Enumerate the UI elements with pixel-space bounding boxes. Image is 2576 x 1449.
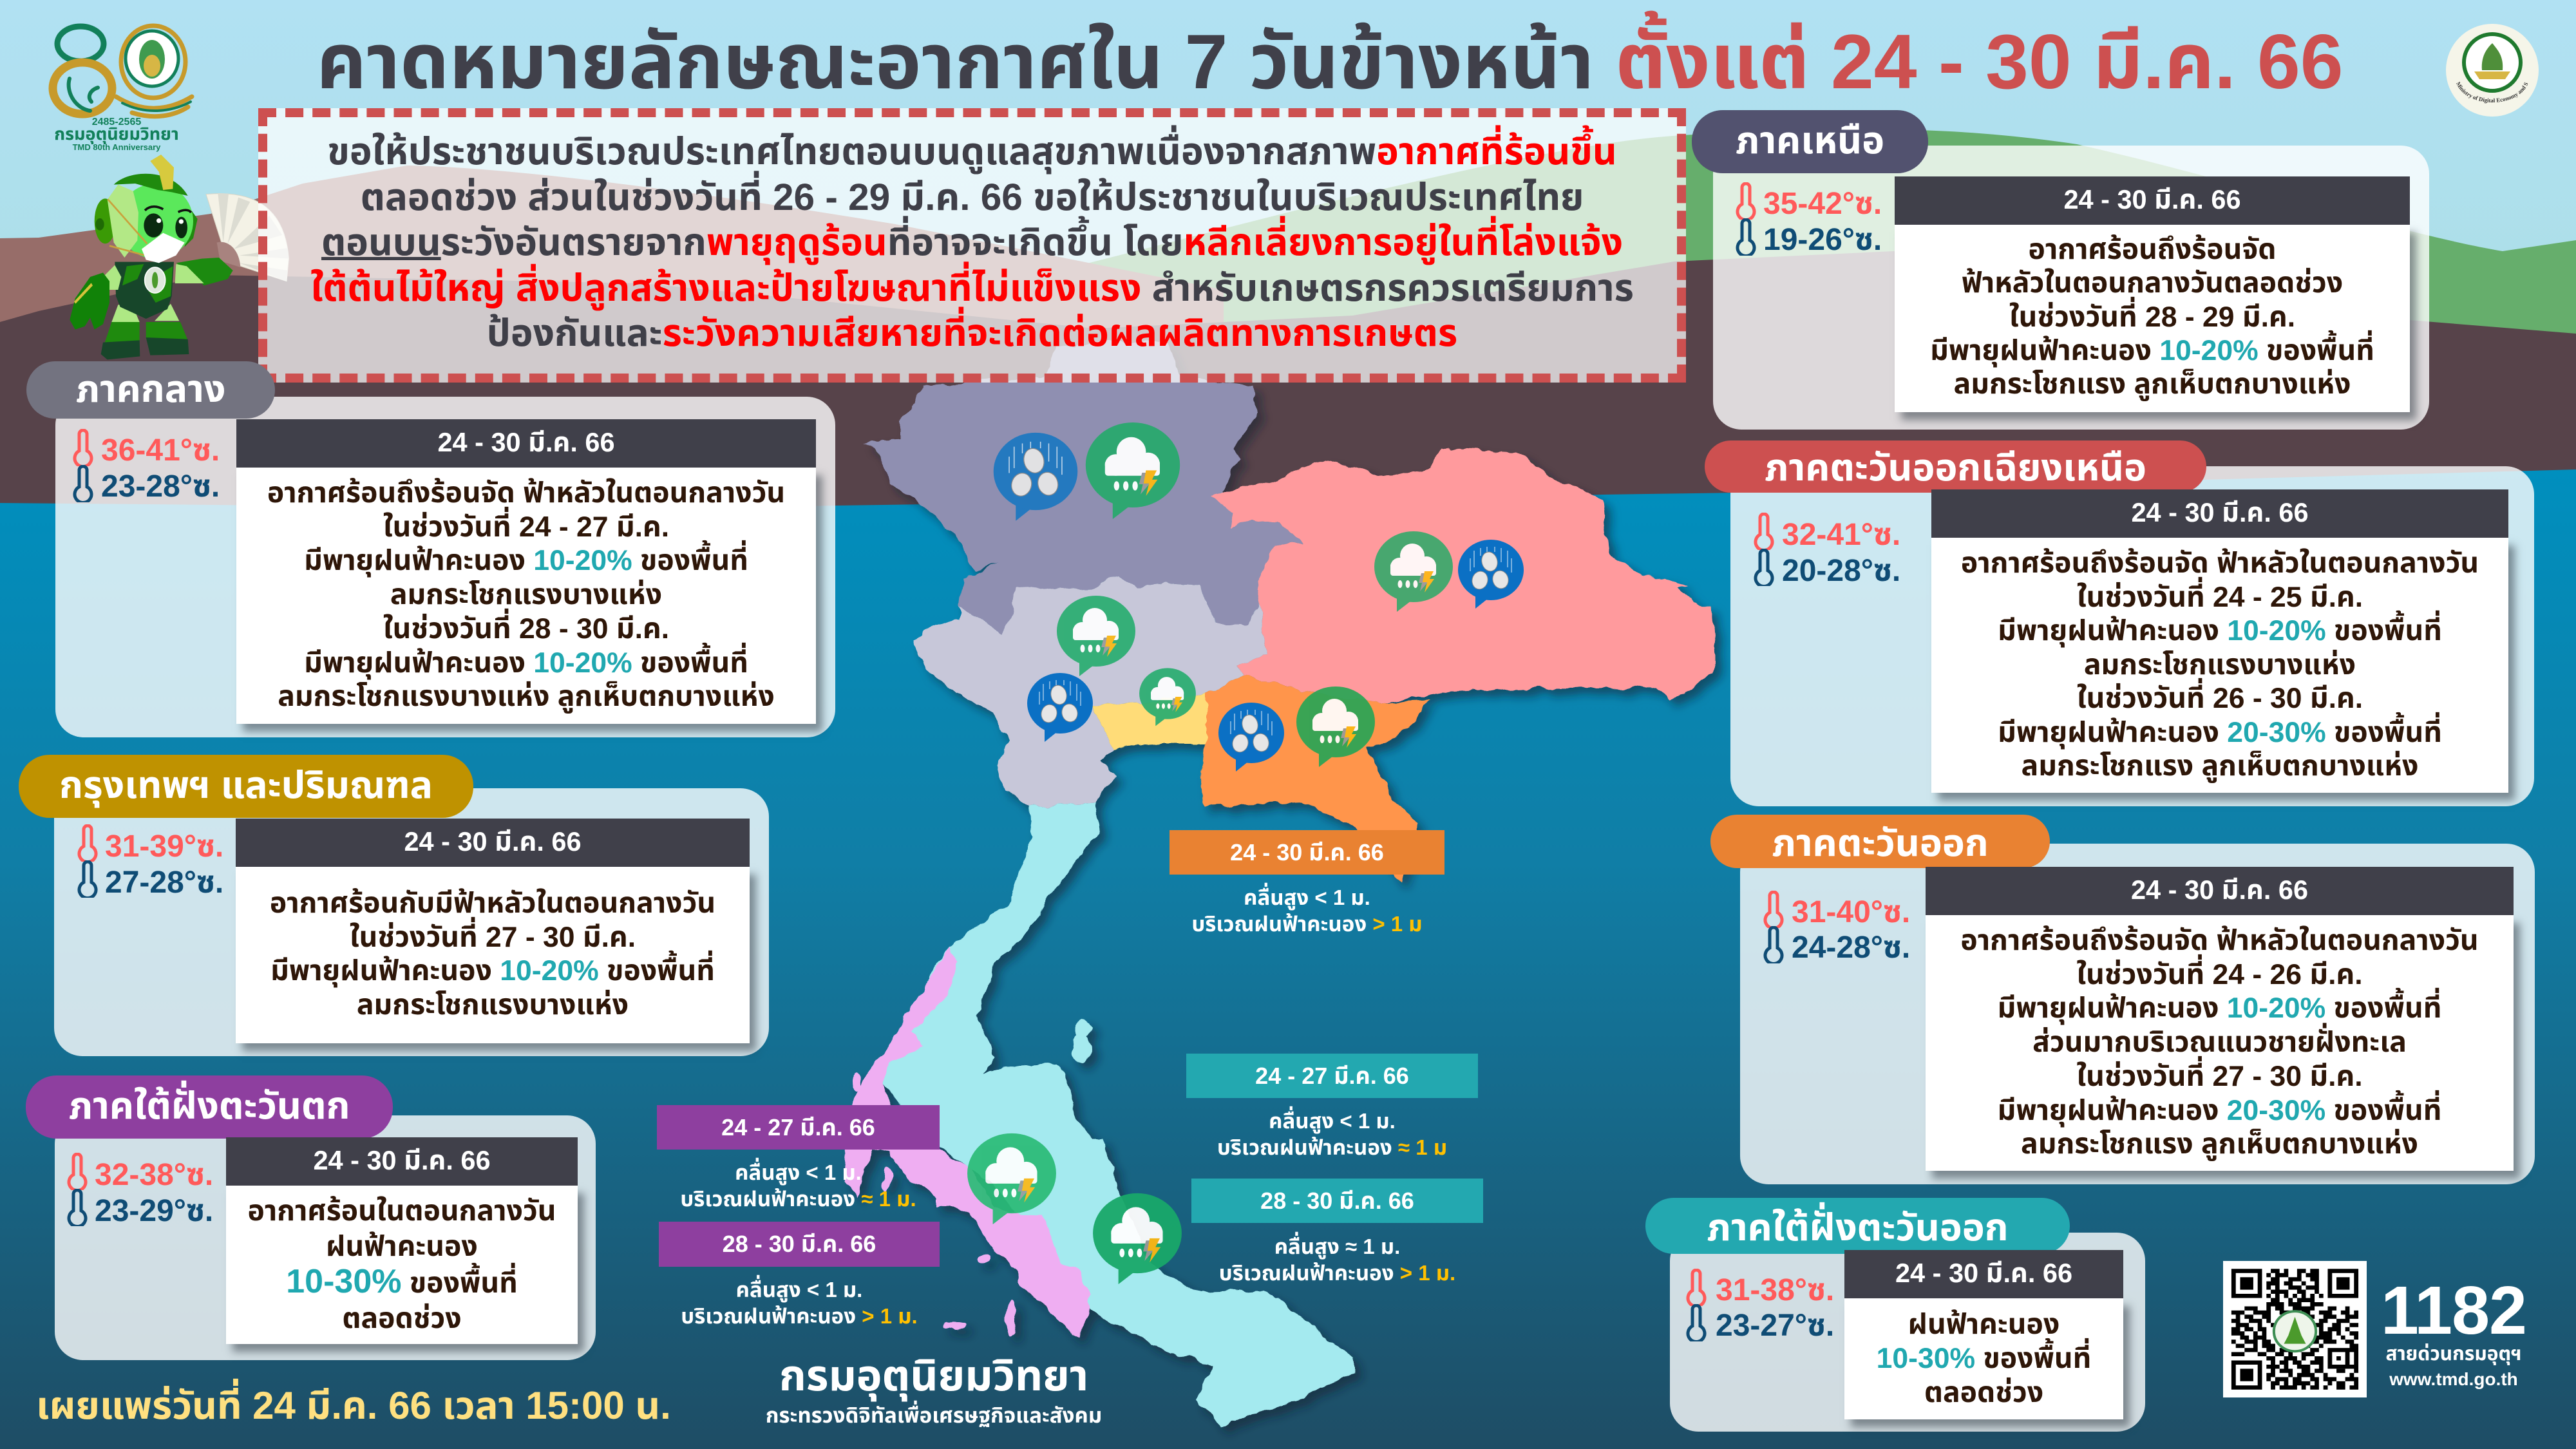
wave text: คลื่นสูง < 1 ม.	[1244, 886, 1370, 909]
forecast text: มีพายุฝนฟ้าคะนอง 10-20% ของพื้นที่	[1998, 615, 2442, 647]
temperature high: 35-42°ซ.	[1763, 187, 1882, 221]
map islands	[851, 1019, 1092, 1337]
thermometer: min temperature	[73, 465, 93, 502]
map region: bangkok	[1093, 694, 1211, 750]
wave text: คลื่นสูง < 1 ม.	[735, 1160, 862, 1184]
forecast text: อากาศร้อนกับมีฟ้าหลัวในตอนกลางวัน	[270, 887, 715, 919]
hotline and website: 1182	[2381, 1273, 2526, 1349]
date header: 24 - 30 มี.ค. 66	[2131, 497, 2309, 527]
weather pin: storm north	[1086, 422, 1180, 519]
icon: ministry seal	[2446, 24, 2539, 117]
map region: south	[883, 803, 1354, 1425]
panel: east region	[1710, 815, 2535, 1184]
department name: กรมอุตุนิยมวิทยา	[779, 1352, 1088, 1400]
forecast text: อากาศร้อนถึงร้อนจัด ฟ้าหลัวในตอนกลางวัน	[1961, 547, 2479, 579]
left arm	[103, 265, 121, 290]
thermometer: min temperature	[1685, 1304, 1707, 1341]
wave text: บริเวณฝนฟ้าคะนอง > 1 ม.	[681, 1304, 918, 1328]
weather pin: storm south west	[967, 1133, 1056, 1224]
date tag	[659, 1222, 940, 1267]
thermometer: max temperature	[73, 429, 93, 466]
hotline and website	[2370, 1280, 2537, 1387]
date tag	[1170, 830, 1444, 875]
body	[115, 262, 174, 319]
fan	[206, 193, 289, 281]
thermometer: max temperature	[67, 1153, 88, 1190]
forecast text: ฝนฟ้าคะนอง	[326, 1230, 478, 1262]
date tag	[657, 1105, 940, 1150]
forecast text: ในช่วงวันที่ 27 - 30 มี.ค.	[2076, 1061, 2363, 1092]
map region: north	[866, 341, 1303, 632]
temperature low: 27-28°ซ.	[105, 866, 223, 900]
thermometer: min temperature	[1736, 218, 1756, 256]
forecast text: ในช่วงวันที่ 24 - 27 มี.ค.	[383, 511, 669, 543]
forecast text: ลมกระโชกแรงบางแห่ง	[390, 579, 662, 611]
region label: south east: ภาคใต้ฝั่งตะวันออก	[1707, 1206, 2009, 1248]
date header: 24 - 30 มี.ค. 66	[1895, 1258, 2072, 1288]
region label: east	[1710, 815, 2050, 868]
thermometer: min temperature	[67, 1189, 88, 1226]
forecast text	[1931, 538, 2508, 793]
warning message box: ตอนบนระวังอันตรายจากพายุฤดูร้อนที่อาจจะเกิดขึ้น โดยหลีกเลี่ยงการอยู่ในที่โล่งแจ้ง	[321, 222, 1623, 263]
temperature high: 31-38°ซ.	[1716, 1273, 1834, 1307]
weather pin: storm northeast	[1374, 531, 1453, 612]
forecast text: ฝนฟ้าคะนอง	[1908, 1309, 2060, 1340]
thermometer: max temperature	[1685, 1269, 1707, 1306]
weather pin: storm south east	[1093, 1193, 1182, 1284]
title: คาดหมายลักษณะอากาศใน 7 วันข้างหน้า ตั้งแต่ 24 - 30 มี.ค. 66	[316, 19, 2344, 105]
forecast text: ลมกระโชกแรง ลูกเห็บตกบางแห่ง	[2021, 1128, 2418, 1160]
date tag: 24 - 30 มี.ค. 66	[1230, 839, 1384, 866]
date tag: 28 - 30 มี.ค. 66	[1260, 1188, 1414, 1214]
panel: north region	[1692, 110, 2429, 430]
region label: north	[1692, 110, 1928, 173]
forecast text	[1844, 1298, 2123, 1419]
weather pin: storm central	[1057, 596, 1135, 676]
QR code	[2223, 1261, 2367, 1397]
head	[95, 198, 116, 243]
date header	[1844, 1250, 2123, 1298]
forecast text: อากาศร้อนถึงร้อนจัด ฟ้าหลัวในตอนกลางวัน	[267, 477, 785, 509]
map region: east	[1200, 677, 1430, 883]
forecast text: ส่วนมากบริเวณแนวชายฝั่งทะเล	[2032, 1027, 2407, 1058]
temperature high: 31-39°ซ.	[105, 829, 223, 864]
date header: 24 - 30 มี.ค. 66	[313, 1145, 491, 1175]
weather pin: hail northeast	[1458, 540, 1524, 609]
wave text	[659, 1276, 940, 1329]
date header: 24 - 30 มี.ค. 66	[404, 826, 582, 857]
forecast text: ในช่วงวันที่ 24 - 26 มี.ค.	[2076, 959, 2363, 990]
icon: ministry seal: Ministry of Digital Economy and Society	[2456, 81, 2528, 103]
map region: northeast	[1211, 448, 1714, 702]
region label: south east	[1645, 1198, 2070, 1254]
forecast text: อากาศร้อนถึงร้อนจัด	[2029, 234, 2276, 265]
forecast text: มีพายุฝนฟ้าคะนอง 10-20% ของพื้นที่	[270, 955, 715, 987]
forecast text: ลมกระโชกแรง ลูกเห็บตกบางแห่ง	[1954, 368, 2351, 400]
forecast text	[226, 1186, 578, 1344]
right arm	[176, 258, 233, 285]
region label: northeast	[1705, 440, 2206, 493]
date header	[1895, 176, 2410, 225]
temperature high: 32-41°ซ.	[1782, 518, 1900, 552]
date header	[1931, 489, 2508, 538]
sea forecast: andaman 24-27	[657, 1105, 940, 1215]
wave text	[1191, 1233, 1483, 1286]
department name: กระทรวงดิจิทัลเพื่อเศรษฐกิจและสังคม	[766, 1403, 1102, 1427]
temperature low: 19-26°ซ.	[1763, 223, 1882, 257]
wave text: คลื่นสูง ≈ 1 ม.	[1274, 1235, 1400, 1258]
panel: south west coast	[26, 1075, 596, 1360]
sea forecast: gulf 28-30	[1191, 1179, 1483, 1288]
sea forecast: gulf upper	[1170, 830, 1444, 940]
date header	[236, 819, 750, 867]
wave text	[1170, 884, 1444, 937]
department name	[741, 1349, 1127, 1430]
date header: 24 - 30 มี.ค. 66	[437, 427, 615, 457]
wave text: บริเวณฝนฟ้าคะนอง > 1 ม	[1191, 912, 1423, 936]
weather pin: hail central	[1027, 673, 1093, 742]
temperature low: 23-27°ซ.	[1716, 1309, 1834, 1343]
temperature low: 23-28°ซ.	[101, 469, 220, 504]
date header	[236, 419, 816, 468]
region label: bangkok: กรุงเทพฯ และปริมณฑล	[59, 764, 433, 806]
warning message box	[258, 108, 1686, 383]
panel: central region	[26, 361, 835, 737]
warning message box: ใต้ต้นไม้ใหญ่ สิ่งปลูกสร้างและป้ายโฆษณาที่ไม่แข็งแรง สำหรับเกษตรกรควรเตรียมการ	[310, 267, 1634, 309]
forecast text: มีพายุฝนฟ้าคะนอง 10-20% ของพื้นที่	[1998, 992, 2441, 1024]
region label: central: ภาคกลาง	[76, 367, 225, 410]
region label: central	[26, 361, 275, 419]
forecast text	[236, 867, 750, 1043]
thermometer: min temperature	[1763, 926, 1785, 963]
forecast text: มีพายุฝนฟ้าคะนอง 20-30% ของพื้นที่	[1998, 1095, 2441, 1126]
map region: central	[915, 574, 1265, 807]
wave text	[1186, 1108, 1478, 1160]
date tag	[1186, 1054, 1478, 1098]
forecast text: 10-30% ของพื้นที่	[286, 1263, 518, 1300]
temperature low: 20-28°ซ.	[1782, 554, 1900, 588]
forecast text: ในช่วงวันที่ 26 - 30 มี.ค.	[2077, 683, 2363, 714]
forecast text: ในช่วงวันที่ 28 - 29 มี.ค.	[2009, 301, 2295, 333]
sea forecast: gulf 24-27	[1186, 1054, 1478, 1163]
wave text: บริเวณฝนฟ้าคะนอง ≈ 1 ม.	[680, 1187, 916, 1211]
forecast text: มีพายุฝนฟ้าคะนอง 10-20% ของพื้นที่	[1930, 335, 2374, 366]
panel: northeast region	[1705, 440, 2534, 806]
forecast text: อากาศร้อนถึงร้อนจัด ฟ้าหลัวในตอนกลางวัน	[1960, 925, 2479, 956]
forecast text: มีพายุฝนฟ้าคะนอง 10-20% ของพื้นที่	[304, 545, 748, 576]
thermometer: min temperature	[77, 860, 98, 898]
region label: south west: ภาคใต้ฝั่งตะวันตก	[69, 1084, 350, 1127]
warning message box: ป้องกันและระวังความเสียหายที่จะเกิดต่อผลผลิตทางการเกษตร	[487, 312, 1457, 354]
wave text: คลื่นสูง < 1 ม.	[736, 1278, 862, 1302]
thermometer: max temperature	[1753, 513, 1775, 550]
warning message box: ตลอดช่วง ส่วนในช่วงวันที่ 26 - 29 มี.ค. 66 ขอให้ประชาชนในบริเวณประเทศไทย	[361, 176, 1584, 218]
date tag	[1191, 1179, 1483, 1223]
forecast text: ลมกระโชกแรงบางแห่ง ลูกเห็บตกบางแห่ง	[278, 681, 775, 712]
wave text: บริเวณฝนฟ้าคะนอง > 1 ม.	[1219, 1261, 1455, 1285]
weather pin: hail north	[994, 433, 1077, 521]
region label: north: ภาคเหนือ	[1736, 119, 1884, 162]
wave text: คลื่นสูง < 1 ม.	[1269, 1109, 1396, 1133]
forecast text: อากาศร้อนในตอนกลางวัน	[248, 1195, 556, 1227]
forecast text	[1926, 915, 2514, 1171]
region label: bangkok	[19, 755, 473, 818]
forecast text: 10-30% ของพื้นที่	[1877, 1343, 2091, 1374]
forecast text: ในช่วงวันที่ 27 - 30 มี.ค.	[350, 921, 636, 953]
hotline and website: สายด่วนกรมอุตุฯ	[2386, 1343, 2521, 1365]
date header	[226, 1137, 578, 1186]
forecast text: ฟ้าหลัวในตอนกลางวันตลอดช่วง	[1962, 267, 2343, 299]
temperature low: 23-29°ซ.	[95, 1194, 213, 1228]
sea forecast: andaman 28-30	[659, 1222, 940, 1331]
date tag: 28 - 30 มี.ค. 66	[723, 1231, 876, 1257]
hotline and website: www.tmd.go.th	[2389, 1369, 2518, 1389]
thermometer: max temperature	[1763, 891, 1785, 928]
temperature high: 36-41°ซ.	[101, 433, 220, 468]
temperature high: 31-40°ซ.	[1792, 895, 1910, 929]
weather pin: storm east	[1296, 687, 1375, 767]
logo: TMD 80th anniversary	[49, 23, 194, 152]
forecast text: ลมกระโชกแรง ลูกเห็บตกบางแห่ง	[2022, 750, 2418, 782]
forecast text: ในช่วงวันที่ 24 - 25 มี.ค.	[2077, 581, 2363, 613]
temperature high: 32-38°ซ.	[95, 1158, 213, 1192]
date header: 24 - 30 มี.ค. 66	[2131, 875, 2308, 905]
map region: south west coast	[842, 945, 1090, 1338]
forecast text	[236, 468, 816, 724]
region label: east: ภาคตะวันออก	[1772, 822, 1989, 864]
date tag: 24 - 27 มี.ค. 66	[721, 1114, 875, 1141]
thermometer: max temperature	[1736, 182, 1756, 220]
forecast text: ลมกระโชกแรงบางแห่ง	[357, 989, 629, 1020]
panel: south east coast	[1645, 1198, 2145, 1432]
mascot with fan	[70, 155, 289, 359]
logo: TMD 80th anniversary: TMD 80th Anniversary	[73, 142, 161, 152]
wave text: บริเวณฝนฟ้าคะนอง ≈ 1 ม	[1217, 1135, 1447, 1159]
date tag: 24 - 27 มี.ค. 66	[1255, 1063, 1409, 1089]
forecast text: ตลอดช่วง	[1924, 1377, 2043, 1408]
forecast text: ตลอดช่วง	[342, 1302, 462, 1334]
forecast text: มีพายุฝนฟ้าคะนอง 20-30% ของพื้นที่	[1998, 716, 2442, 748]
legs	[111, 301, 140, 322]
panel: bangkok and vicinity	[19, 755, 769, 1056]
wave text	[657, 1159, 940, 1212]
forecast text: มีพายุฝนฟ้าคะนอง 10-20% ของพื้นที่	[304, 647, 748, 679]
region label: northeast: ภาคตะวันออกเฉียงเหนือ	[1765, 446, 2146, 488]
logo: TMD 80th anniversary: กรมอุตุนิยมวิทยา	[54, 124, 179, 144]
thermometer: min temperature	[1753, 549, 1775, 586]
thermometer: max temperature	[77, 824, 98, 862]
temperature low: 24-28°ซ.	[1792, 931, 1910, 965]
region label: south west	[26, 1075, 393, 1139]
weather pin: storm bangkok	[1139, 668, 1196, 726]
logo: TMD 80th anniversary: 2485-2565	[92, 117, 141, 128]
weather pin: hail east	[1218, 703, 1284, 772]
forecast text: ในช่วงวันที่ 28 - 30 มี.ค.	[383, 613, 669, 645]
forecast text	[1895, 225, 2410, 412]
date header: 24 - 30 มี.ค. 66	[2063, 184, 2241, 214]
date header	[1926, 867, 2514, 915]
forecast text: ลมกระโชกแรงบางแห่ง	[2084, 649, 2356, 680]
warning message box: ขอให้ประชาชนบริเวณประเทศไทยตอนบนดูแลสุขภาพเนื่องจากสภาพอากาศที่ร้อนขึ้น	[327, 131, 1617, 173]
publish date: เผยแพร่วันที่ 24 มี.ค. 66 เวลา 15:00 น.	[36, 1384, 671, 1427]
